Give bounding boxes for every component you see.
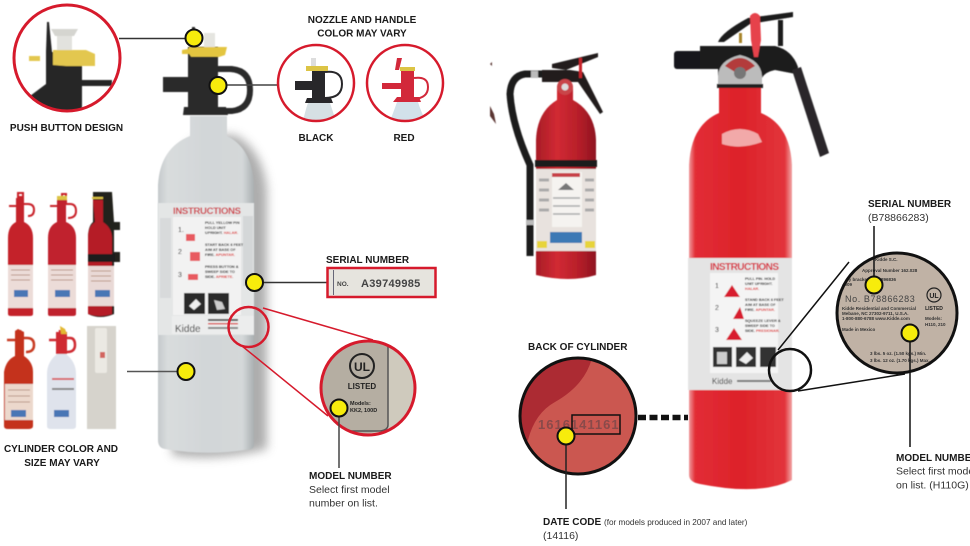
instruction label: FIRE. APUNTAR.: [745, 308, 775, 312]
instruction label: UNIT UPRIGHT.: [745, 282, 773, 286]
marker: serial right: [866, 276, 882, 294]
instruction label: STAND BACK 6 FEET: [745, 298, 784, 302]
label: black: BLACK: [298, 133, 334, 144]
instruction label: Kidde: [712, 377, 733, 386]
zoom circle: serial and UL: only brackets P/N 896836: [842, 277, 897, 282]
instruction label: SQUEEZE LEVER &: [745, 319, 781, 323]
label: serial number right: (B78866283): [868, 212, 929, 224]
small black circle on label: [769, 349, 811, 391]
zoom circle: serial and UL: H110, 210: [925, 322, 946, 327]
valve: [674, 12, 829, 157]
panel: large red extinguisher: [674, 12, 829, 489]
label: model number: number on list.: [309, 498, 378, 510]
instruction label: SIDE. APRIETE.: [205, 275, 233, 279]
instruction label: INSTRUCTIONS: [173, 206, 241, 217]
cylinder: [689, 86, 792, 489]
label: date code: (14116): [543, 530, 578, 542]
small white: [47, 326, 76, 429]
serial number plate: [328, 268, 436, 297]
zoom circle: UL listed: [320, 340, 420, 440]
callout line: handle: [226, 84, 278, 86]
zoom circle: UL listed: LISTED: [348, 382, 376, 391]
cover: [87, 326, 116, 429]
zoom circle: UL listed: UL: [354, 360, 370, 374]
label: serial number right: SERIAL NUMBER: [868, 199, 952, 210]
instruction label: PRESS BUTTON &: [205, 265, 239, 269]
zoom circle: serial and UL: Made in Mexico: [842, 327, 876, 332]
zoom circle: serial and UL: Mebane, NC 27302-9711, U.S.A.: [842, 311, 909, 316]
instruction label: AIM AT BASE OF: [205, 248, 236, 252]
label: [536, 169, 596, 251]
label: push button design: PUSH BUTTON DESIGN: [10, 123, 123, 134]
icon: red nozzle circle: [367, 45, 443, 121]
instruction label: INSTRUCTIONS: [710, 262, 779, 273]
instruction label: 2: [178, 249, 182, 256]
small red 2: [48, 194, 76, 316]
zoom circle: date code: 1616141161: [538, 417, 620, 432]
zoom circle: serial and UL: Approval Number 162.028: [862, 268, 918, 273]
group: color variant extinguishers: [4, 192, 120, 429]
instruction label: FIRE. APUNTAR.: [205, 253, 235, 257]
zoom circle: serial and UL: LISTED: [925, 306, 943, 312]
zoom circle: serial and UL: UL: [929, 293, 939, 300]
label: back of cylinder: BACK OF CYLINDER: [528, 342, 628, 353]
icon: black nozzle circle: [278, 45, 354, 121]
label: model number right: on list. (H110G): [896, 480, 969, 492]
zoom connector: right: [778, 262, 905, 391]
zoom circle: serial and UL: No. B78866283: [845, 294, 915, 304]
instruction label: AIM AT BASE OF: [745, 303, 776, 307]
instruction label: Kidde: [175, 324, 201, 335]
hose: [510, 74, 542, 256]
marker: serial: [246, 274, 263, 291]
instruction label: SWEEP SIDE TO: [205, 270, 235, 274]
zoom circle: serial and UL: 3 lbs. 12 oz. (1.70 kgs.) Max.: [870, 358, 930, 363]
heading: nozzle and handle: COLOR MAY VARY: [317, 28, 407, 40]
cylinder: [536, 86, 596, 279]
instruction label: [688, 258, 792, 390]
cylinder body: [158, 116, 254, 453]
icon: push button zoom circle: [14, 5, 120, 112]
marker: model right: [902, 324, 918, 342]
artifact fragments: [490, 62, 496, 124]
callout line: model number: [338, 415, 340, 468]
instruction label: HOLD UNIT: [205, 226, 226, 230]
callout line: serial right: [873, 226, 875, 278]
instruction label: 2: [715, 305, 719, 312]
zoom circle: serial and UL: 3 lbs. 5 oz. (1.50 kgs.) Min.: [870, 351, 926, 356]
instruction label: START BACK 6 FEET: [205, 243, 244, 247]
label: cylinder color and size: SIZE MAY VARY: [24, 458, 100, 469]
heading: nozzle and handle: NOZZLE AND HANDLE: [308, 15, 417, 26]
zoom connector: model number: [242, 308, 373, 416]
marker: cylinder: [178, 363, 194, 380]
instruction label: SWEEP SIDE TO: [745, 324, 775, 328]
marker: model number: [330, 400, 348, 416]
serial number plate: A39749985: [361, 278, 421, 290]
label: cylinder color and size: CYLINDER COLOR AND: [4, 444, 118, 455]
label: serial number: SERIAL NUMBER: [326, 255, 410, 266]
zoom circle: UL listed: Models:: [350, 401, 371, 407]
small red with bracket: [88, 192, 120, 317]
panel: white extinguisher: [158, 27, 267, 457]
label: model number: Select first model: [309, 484, 390, 496]
instruction label: HALAR.: [745, 287, 759, 291]
dashed connector: [638, 415, 688, 420]
callout line: push button: [119, 38, 186, 40]
pin: [182, 33, 227, 57]
serial number plate: NO.: [337, 281, 349, 288]
marker: date code: [558, 428, 574, 444]
instruction label: 3: [715, 327, 719, 334]
small red 3: [4, 329, 34, 429]
label: date code: DATE CODE: [543, 517, 601, 528]
instruction label: SIDE. PRESIONAR.: [745, 329, 780, 333]
zoom circle: date code: [520, 358, 636, 474]
instruction label: 1.: [178, 227, 184, 234]
label: red: RED: [393, 133, 415, 144]
zoom circle: serial and UL: Kidde S.C.: [875, 257, 898, 262]
small circle on extinguisher: [228, 307, 268, 347]
zoom circle: serial and UL: 9009: [842, 282, 853, 287]
instruction label: PULL YELLOW PIN: [205, 221, 240, 225]
label: date code: (for models produced in 2007 and later): [604, 518, 748, 527]
instruction label: 3: [178, 272, 182, 279]
callout line: model right: [909, 340, 911, 447]
marker: push button: [186, 30, 202, 46]
label: model number: MODEL NUMBER: [309, 471, 392, 482]
instruction label: [158, 203, 254, 335]
zoom circle: serial and UL: Kidde Residential and Commercial: [842, 306, 916, 311]
zoom circle: serial and UL: Models:: [925, 316, 943, 321]
small red 1: [8, 193, 34, 316]
zoom circle: UL listed: KK2, 100D: [350, 408, 377, 414]
valve head: [163, 27, 253, 115]
callout line: date code: [565, 443, 567, 509]
instruction label: 1: [715, 283, 719, 290]
valve: [542, 70, 603, 114]
zoom circle: serial and UL: 1-800-880-6788 www.Kidde.com: [842, 316, 910, 321]
panel: mid-size extinguisher with hose: [490, 53, 603, 279]
callout line: cylinder: [127, 370, 178, 372]
marker: handle: [210, 77, 226, 94]
instruction label: UPRIGHT. HALAR.: [205, 231, 238, 235]
instruction label: PULL PIN. HOLD: [745, 277, 775, 281]
zoom circle: serial and UL: [835, 250, 959, 376]
callout line: serial: [262, 282, 327, 284]
